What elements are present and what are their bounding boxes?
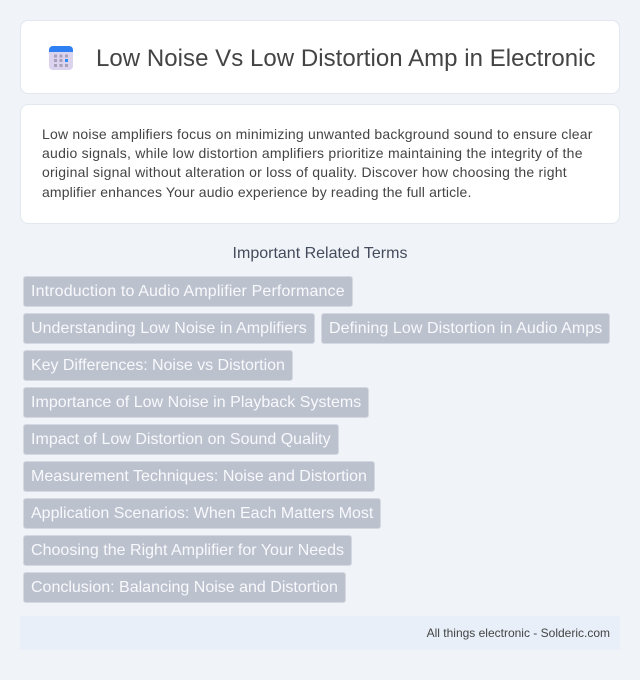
tag — [321, 313, 610, 344]
tag: Measurement Techniques: Noise and Distortion — [31, 468, 367, 485]
tag: Defining Low Distortion in Audio Amps — [329, 320, 602, 337]
intro text: audio signals, while low distortion amplifiers prioritize maintaining the integrity of the — [42, 145, 583, 161]
intro text: Low noise amplifiers focus on minimizing unwanted background sound to ensure clear — [42, 126, 593, 142]
tag: Key Differences: Noise vs Distortion — [31, 357, 285, 374]
footer bar — [20, 616, 620, 650]
tag: Conclusion: Balancing Noise and Distortion — [31, 579, 338, 596]
tag: Understanding Low Noise in Amplifiers — [31, 320, 307, 337]
tag: Introduction to Audio Amplifier Performance — [31, 283, 345, 300]
tag — [23, 572, 346, 603]
tag — [23, 461, 375, 492]
icon: calendar — [49, 46, 73, 70]
section heading: Important Related Terms — [233, 245, 407, 262]
intro text: original signal without alteration or loss of quality. Discover how choosing the right — [42, 164, 567, 180]
tag — [23, 387, 369, 418]
tag: Importance of Low Noise in Playback Systems — [31, 394, 361, 411]
related terms list — [23, 276, 610, 603]
tag — [23, 313, 315, 344]
intro text — [42, 126, 593, 200]
tag — [23, 535, 352, 566]
tag: Application Scenarios: When Each Matters Most — [31, 505, 373, 522]
footer text: All things electronic - Solderic.com — [427, 626, 610, 640]
title: Low Noise Vs Low Distortion Amp in Electronic — [96, 45, 596, 72]
intro text panel — [20, 104, 620, 224]
tag: Choosing the Right Amplifier for Your Needs — [31, 542, 344, 559]
tag — [23, 350, 293, 381]
tag — [23, 424, 339, 455]
tag — [23, 498, 381, 529]
intro text: amplifier enhances Your audio experience by reading the full article. — [42, 184, 472, 200]
tag: Impact of Low Distortion on Sound Quality — [31, 431, 331, 448]
tag — [23, 276, 353, 307]
header panel — [20, 20, 620, 94]
